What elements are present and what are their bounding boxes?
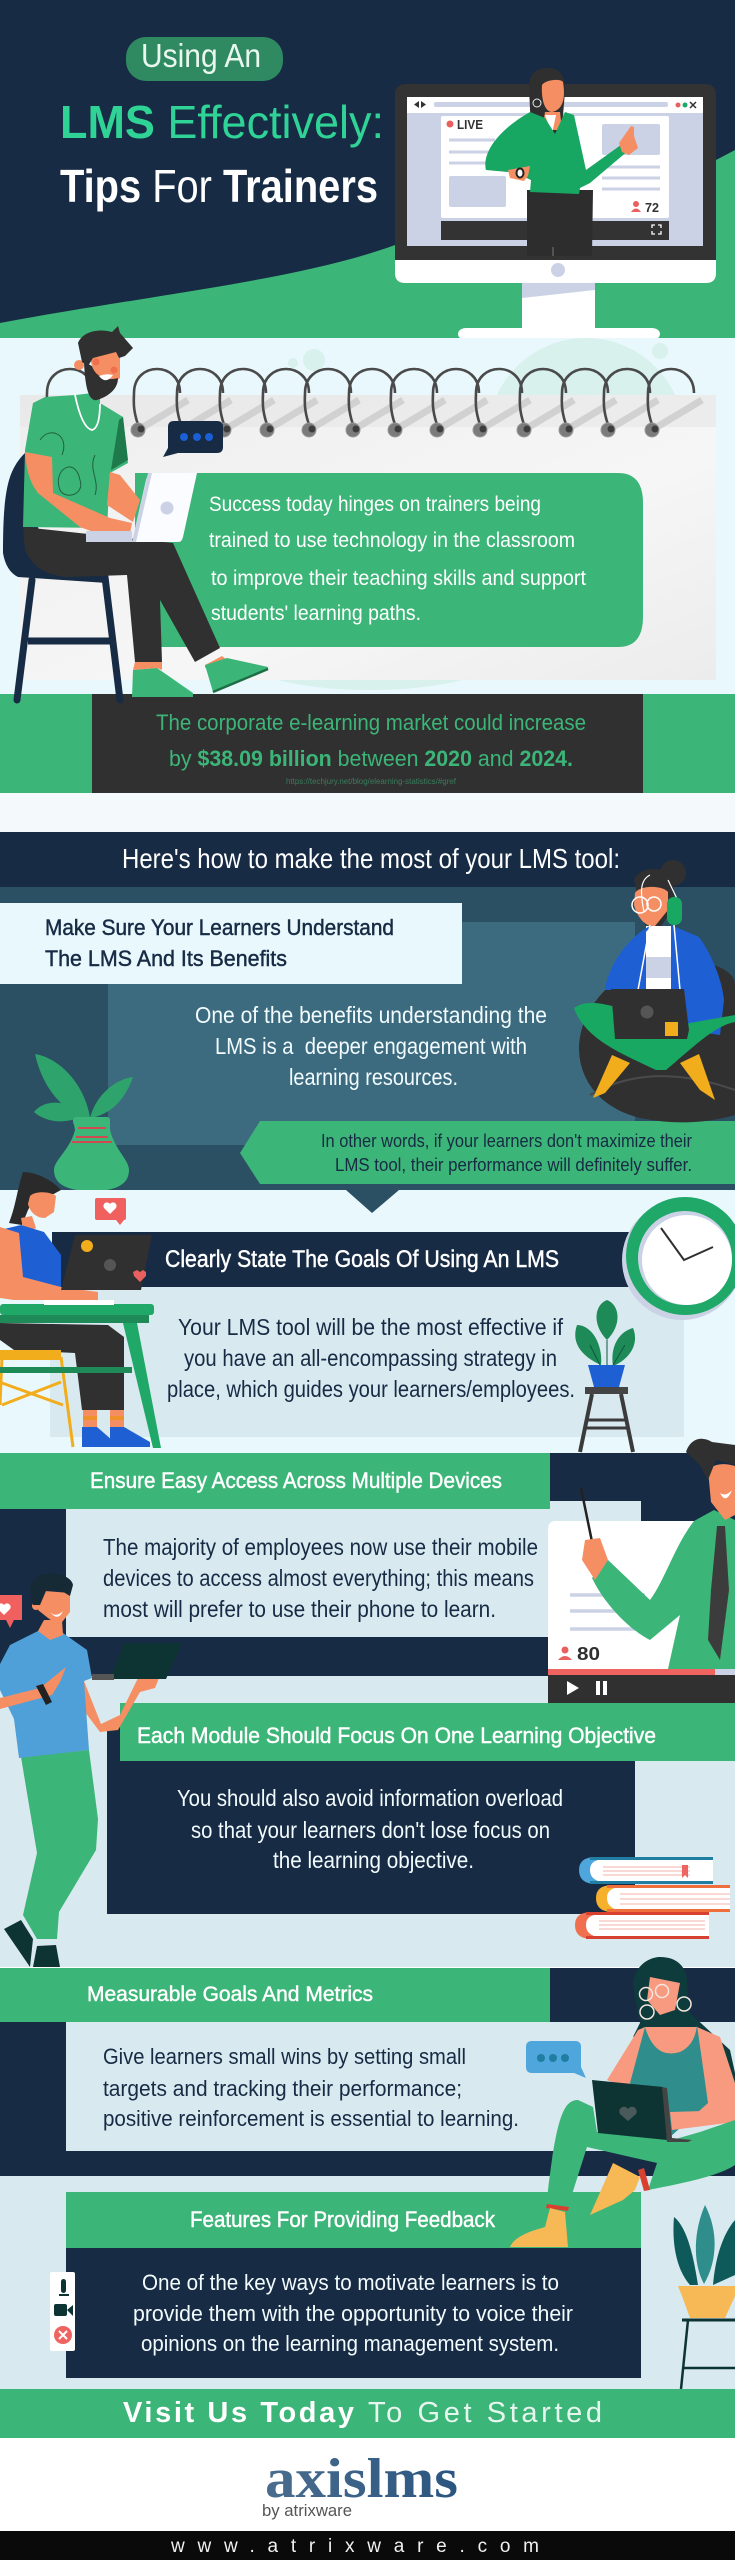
icon: call controls [50, 2272, 75, 2351]
book orange [596, 1885, 730, 1912]
heading banner [0, 1453, 550, 1509]
illustration: plant vase [34, 1054, 133, 1191]
illustration: man on stool with laptop [3, 326, 268, 700]
logo [0, 2438, 735, 2531]
panel: one learning objective [107, 1703, 735, 1914]
panel: clear goals [0, 1190, 735, 1453]
icon: speech bubble dots [163, 421, 223, 457]
panel: understand the LMS [0, 887, 735, 1190]
body text: opinions on the learning management system. [141, 2331, 559, 2356]
notebook page [20, 369, 716, 680]
call to action band: To Get Started [368, 2397, 602, 2429]
logo: by atrixware [262, 2501, 352, 2520]
body text: positive reinforcement is essential to learning. [103, 2106, 519, 2131]
illustration: man with laptop [0, 1574, 182, 1967]
spiral binding [47, 369, 694, 437]
panel: measurable goals [0, 1968, 735, 2389]
statistic band: The corporate e-learning market could increase [156, 710, 586, 735]
body text [133, 2270, 573, 2356]
title [60, 37, 384, 212]
body text: LMS is a deeper engagement with [215, 1033, 527, 1059]
body text [195, 1002, 547, 1090]
panel: multiple devices [0, 1453, 735, 1967]
title pill [126, 37, 283, 81]
icon: blue chat bubble [526, 2041, 586, 2078]
woman presenter [485, 68, 638, 256]
heading banner [66, 2192, 641, 2248]
icon: heart bubble [95, 1198, 126, 1225]
heading banner: Each Module Should Focus On One Learning Objective [137, 1723, 656, 1748]
call to action band [0, 2389, 735, 2438]
call to action band: Visit Us Today [123, 2397, 354, 2429]
body text [103, 2044, 519, 2131]
body text: provide them with the opportunity to voice their [133, 2301, 573, 2326]
body text: so that your learners don't lose focus on [191, 1817, 550, 1843]
website footer [0, 2531, 735, 2560]
illustration: woman sitting with laptop [510, 1957, 735, 2247]
monitor illustration: LIVE [457, 117, 483, 132]
logo: axislms [265, 2448, 458, 2510]
section heading band [0, 832, 735, 887]
book red [575, 1912, 709, 1939]
statistic band: by $38.09 billion between 2020 and 2024. [169, 746, 573, 771]
body text: learning resources. [289, 1064, 458, 1090]
body text: The majority of employees now use their mobile [103, 1534, 538, 1560]
body text: One of the key ways to motivate learners is to [142, 2270, 559, 2295]
panel heading [0, 903, 462, 984]
illustration: fern on stand [673, 2205, 735, 2389]
title: LMS Effectively: [60, 96, 384, 148]
callout [240, 1121, 735, 1184]
intro text panel: students' learning paths. [211, 602, 421, 625]
body text: devices to access almost everything; this means [103, 1565, 534, 1591]
body text: targets and tracking their performance; [103, 2076, 462, 2101]
intro text panel: to improve their teaching skills and support [211, 567, 586, 590]
icon: heart bubble left [0, 1595, 22, 1628]
icon: clock [622, 1197, 735, 1320]
website footer: www.atrixware.com [170, 2536, 539, 2557]
callout: In other words, if your learners don't maximize their [321, 1131, 692, 1151]
illustration: video screen with teacher: 80 [577, 1644, 600, 1664]
intro text panel: trained to use technology in the classroom [209, 529, 575, 552]
monitor illustration [395, 68, 716, 340]
heading banner [120, 1703, 735, 1761]
heading banner: Features For Providing Feedback [190, 2207, 496, 2232]
section heading band: Here's how to make the most of your LMS tool: [122, 843, 620, 874]
intro background [0, 338, 735, 695]
body text [177, 1785, 563, 1873]
title: Tips For Trainers [60, 160, 378, 212]
body text: the learning objective. [273, 1847, 474, 1873]
body text: most will prefer to use their phone to learn. [103, 1596, 496, 1622]
body text: You should also avoid information overload [177, 1785, 563, 1811]
callout: LMS tool, their performance will definitely suffer. [335, 1155, 692, 1175]
body text: One of the benefits understanding the [195, 1002, 547, 1028]
body text: Your LMS tool will be the most effective if [178, 1314, 564, 1340]
heading banner [52, 1232, 630, 1287]
heading banner: Ensure Easy Access Across Multiple Devices [90, 1468, 502, 1493]
intro text panel: Success today hinges on trainers being [209, 493, 541, 516]
title: Using An [141, 37, 261, 74]
heading banner: Clearly State The Goals Of Using An LMS [165, 1246, 559, 1273]
statistic band: https://techjury.net/blog/elearning-statistics/#gref [286, 777, 457, 786]
illustration: video screen with teacher [548, 1439, 735, 1703]
heading banner [0, 1968, 550, 2022]
body text: place, which guides your learners/employees. [167, 1376, 575, 1402]
gap strip [0, 793, 735, 832]
panel heading: Make Sure Your Learners Understand [45, 915, 394, 940]
header background [0, 0, 735, 340]
body text [167, 1314, 575, 1402]
monitor illustration: 72 [645, 200, 659, 215]
body text [103, 1534, 538, 1622]
body text: Give learners small wins by setting small [103, 2044, 466, 2069]
heading banner: Measurable Goals And Metrics [87, 1983, 373, 2006]
panel heading: The LMS And Its Benefits [45, 946, 287, 971]
illustration: woman with headset on beanbag [574, 860, 735, 1122]
body text: you have an all-encompassing strategy in [184, 1345, 557, 1371]
panel: providing feedback [66, 2192, 641, 2378]
illustration: potted plant on stool [575, 1300, 635, 1452]
intro text panel [135, 473, 643, 647]
teacher [581, 1439, 735, 1669]
illustration: woman at desk [0, 1172, 161, 1448]
statistic band [0, 694, 735, 793]
illustration: books [575, 1857, 730, 1939]
book blue [579, 1857, 713, 1884]
